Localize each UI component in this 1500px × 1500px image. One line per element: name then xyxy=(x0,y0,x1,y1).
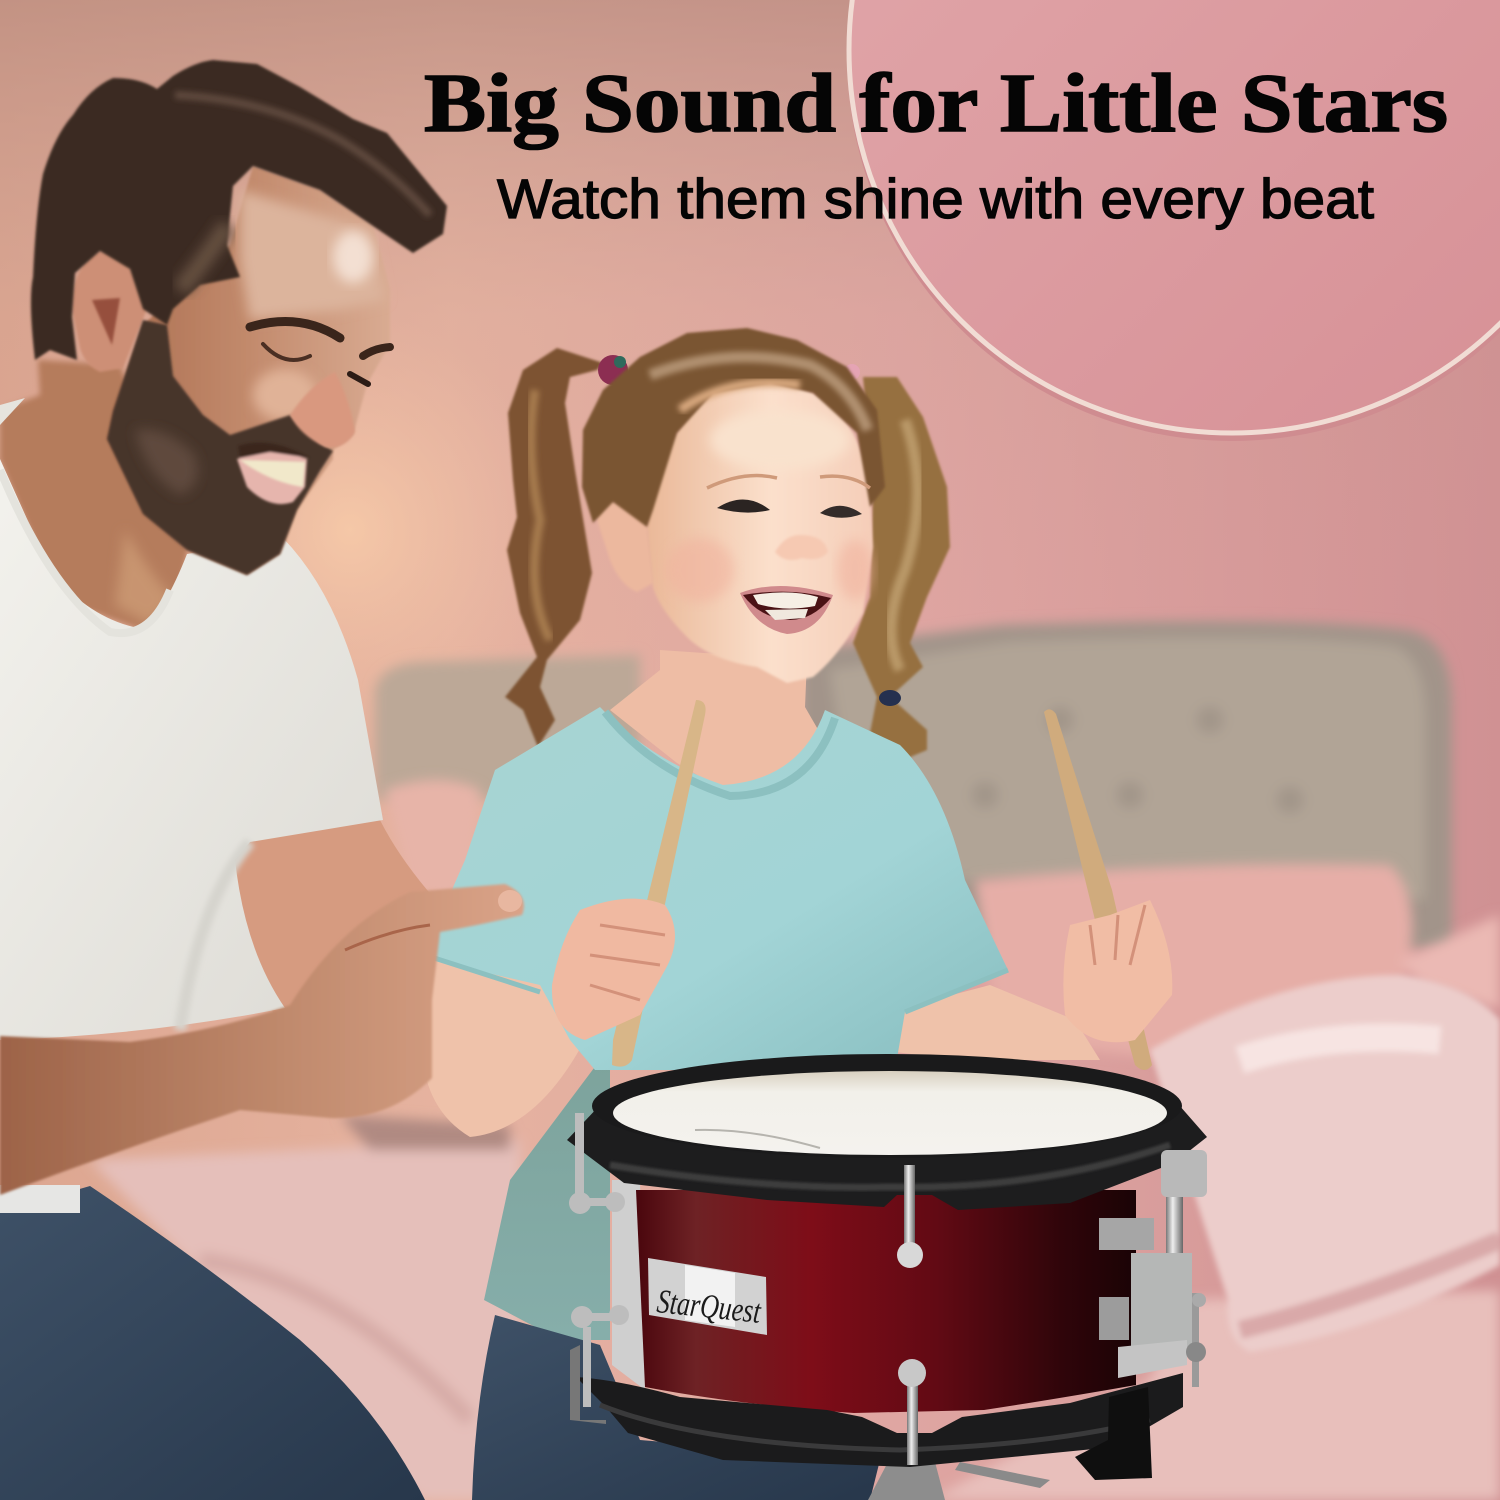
father: jeans xyxy=(0,1186,425,1500)
father: hair xyxy=(31,60,447,360)
pink circle badge xyxy=(847,0,1500,441)
drum: badge with StarQuest logo: StarQuest xyxy=(655,1283,764,1331)
drum: top rim xyxy=(592,1054,1182,1158)
father: ear xyxy=(72,251,147,372)
girl: mouth xyxy=(740,586,833,634)
left drumstick xyxy=(612,700,706,1067)
girl: eyebrows xyxy=(707,476,870,488)
girl: neck xyxy=(610,650,820,790)
girl: jeans xyxy=(472,1315,880,1500)
girl: hair ties xyxy=(598,355,901,706)
girl: arms xyxy=(422,960,590,1137)
drum: red shell xyxy=(636,1190,1136,1413)
father: upper arm xyxy=(235,820,440,1060)
right drumstick xyxy=(1044,709,1152,1070)
title: Big Sound for Little Stars xyxy=(424,57,1448,150)
drum: top hoop xyxy=(567,1105,1207,1210)
background: blurred pillows and bed xyxy=(90,780,1500,1500)
girl: nose xyxy=(775,535,828,560)
girl: left pigtail xyxy=(505,348,603,747)
girl: hair top xyxy=(582,328,885,527)
drum: left hardware xyxy=(569,1113,629,1424)
father: hand on girl's shoulder xyxy=(0,884,524,1195)
father: face xyxy=(107,166,390,575)
girl: t-shirt xyxy=(422,707,1008,1070)
father: mouth xyxy=(237,442,310,504)
father: beard xyxy=(107,320,333,575)
background: blurred headboard xyxy=(375,621,1452,950)
girl: face xyxy=(647,384,873,683)
girl: ear xyxy=(597,502,653,592)
father xyxy=(0,60,447,1500)
girl: lower t-shirt in shadow xyxy=(484,1060,610,1340)
father: brow and eyes xyxy=(250,322,390,384)
girl: right pigtail xyxy=(853,377,950,760)
drum: snare strainer xyxy=(1075,1150,1207,1480)
girl: eyes xyxy=(717,499,862,518)
girl xyxy=(422,328,1100,1500)
drum: white head xyxy=(613,1071,1167,1155)
drum: stand legs xyxy=(868,1462,945,1500)
drum: centre tension lugs xyxy=(897,1165,926,1465)
snare drum xyxy=(567,1054,1207,1500)
girl: hands holding sticks xyxy=(552,899,1172,1042)
father: neck xyxy=(0,360,190,640)
father: nose xyxy=(290,372,355,447)
drum: logo on head xyxy=(695,1130,820,1148)
background: large satin pillow xyxy=(1150,975,1500,1352)
drum: badge with StarQuest logo xyxy=(648,1258,767,1335)
drum: silver shell edge xyxy=(612,1180,645,1390)
drumsticks xyxy=(612,700,1152,1070)
father: white t-shirt xyxy=(0,459,383,1040)
drum: bottom hoop xyxy=(576,1373,1183,1467)
subtitle: Watch them shine with every beat xyxy=(497,167,1374,230)
